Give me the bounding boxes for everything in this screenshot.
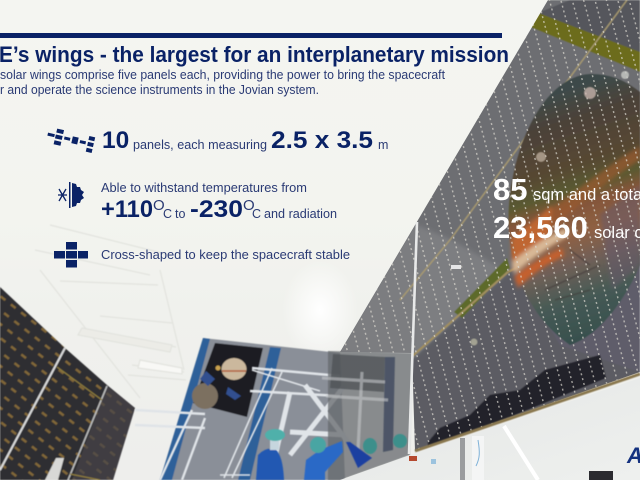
background truss structure xyxy=(35,225,186,398)
stat: panel dimensions: m xyxy=(378,138,388,152)
stat: temperature range: O xyxy=(243,197,255,214)
stat: temperature range xyxy=(58,181,337,223)
stat: temperature range: to xyxy=(175,207,185,221)
technician 3 xyxy=(346,438,377,468)
stat: temperature range: Able to withstand temperatures from xyxy=(101,181,307,195)
white spacecraft base xyxy=(340,378,640,480)
ceiling light glow xyxy=(282,260,358,360)
panel far section xyxy=(340,222,417,354)
panel edge bottom strip xyxy=(415,374,640,451)
panel upper section xyxy=(540,0,640,52)
solar array: left xyxy=(0,287,135,480)
glass test panel xyxy=(322,351,412,480)
Jupiter bands xyxy=(512,146,640,290)
title: E’s wings - the largest for an interplanetary mission xyxy=(0,42,509,67)
technician 4 xyxy=(393,434,407,448)
vertical support bar xyxy=(409,222,417,454)
stat: temperature range: O xyxy=(153,197,165,214)
stat: area and solar cells xyxy=(493,172,640,245)
icon: cross xyxy=(54,242,88,268)
stat: temperature range: and radiation xyxy=(264,207,337,221)
stat: area and solar cells: 85 xyxy=(493,172,527,207)
stat: panel dimensions: 2.5 x 3.5 xyxy=(271,127,373,154)
stat: panel dimensions: 10 xyxy=(102,127,129,154)
stat: temperature range: C xyxy=(252,207,261,221)
technicians xyxy=(256,429,407,480)
intro text: r and operate the science instruments in the Jovian system. xyxy=(0,83,319,97)
main solar panel with Jupiter reflection xyxy=(340,0,640,451)
technician 1 xyxy=(256,429,285,480)
white support frames xyxy=(135,368,350,480)
olive reflection bands xyxy=(528,12,640,72)
icon: frost and sun xyxy=(58,182,84,208)
intro text: solar wings comprise five panels each, providing the power to bring the spacecraft xyxy=(0,68,446,82)
Jupiter reflection xyxy=(508,74,640,345)
technician 2 xyxy=(304,437,343,480)
stat: temperature range: +110 xyxy=(101,196,153,223)
cleanroom wall with poster xyxy=(160,338,345,480)
intro text xyxy=(0,68,446,97)
panel lower section xyxy=(413,271,638,449)
dotted cells xyxy=(344,0,640,449)
stat: panel dimensions: panels, each measuring xyxy=(133,138,267,152)
black circuit shadow xyxy=(428,355,606,450)
gold frame lines xyxy=(400,0,627,300)
stat: area and solar cells: 23,560 xyxy=(493,210,588,245)
bright reflections xyxy=(451,265,461,269)
stat: cross shape: Cross-shaped to keep the spacecraft stable xyxy=(101,248,350,262)
stat: temperature range: C xyxy=(163,207,172,221)
icon: satellite xyxy=(46,127,95,153)
stat: cross shape xyxy=(54,242,350,268)
stat: temperature range: -230 xyxy=(190,196,243,223)
header rule xyxy=(0,33,502,38)
stat: panel dimensions xyxy=(46,127,388,154)
poster of the solar system xyxy=(192,343,263,417)
